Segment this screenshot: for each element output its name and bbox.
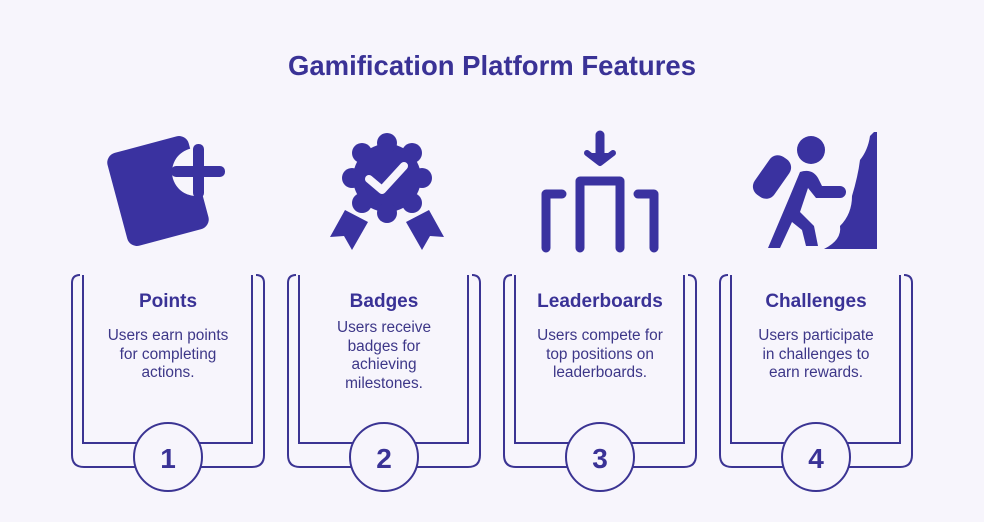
text: leaderboards: leaderboards. xyxy=(553,364,647,381)
text: badges: milestones. xyxy=(345,374,423,392)
text: challenges: Users participate xyxy=(758,327,874,344)
numbers xyxy=(160,443,824,474)
icon: badge xyxy=(330,133,444,250)
heading: leaderboards: Leaderboards xyxy=(537,291,663,312)
text: points: for completing xyxy=(120,346,216,362)
text: points: Users earn points xyxy=(108,327,228,344)
text: challenges: earn rewards. xyxy=(769,364,863,381)
title: Gamification Platform Features xyxy=(288,50,696,81)
text: leaderboards: Users compete for xyxy=(537,327,663,344)
icon: leaderboard xyxy=(546,135,654,248)
icon: points card plus xyxy=(105,134,225,248)
heading: challenges: Challenges xyxy=(765,291,867,312)
text: badges: Users receive xyxy=(337,319,431,336)
cards frames xyxy=(72,275,912,491)
numbers: 4 xyxy=(808,443,824,474)
text: leaderboards xyxy=(537,327,663,381)
text: badges xyxy=(337,319,431,392)
icon: climber xyxy=(749,132,877,249)
text: challenges xyxy=(758,327,874,381)
heading: points: Points xyxy=(139,291,197,312)
text: badges: badges for xyxy=(348,338,420,354)
text: points: actions. xyxy=(141,364,195,381)
numbers: 3 xyxy=(592,443,608,474)
text: points xyxy=(108,327,228,381)
text: badges: achieving xyxy=(351,356,417,373)
numbers: 1 xyxy=(160,443,176,474)
text: challenges: in challenges to xyxy=(763,346,869,362)
numbers: 2 xyxy=(376,443,392,474)
text: leaderboards: top positions on xyxy=(546,346,654,362)
heading: badges: Badges xyxy=(350,291,418,312)
